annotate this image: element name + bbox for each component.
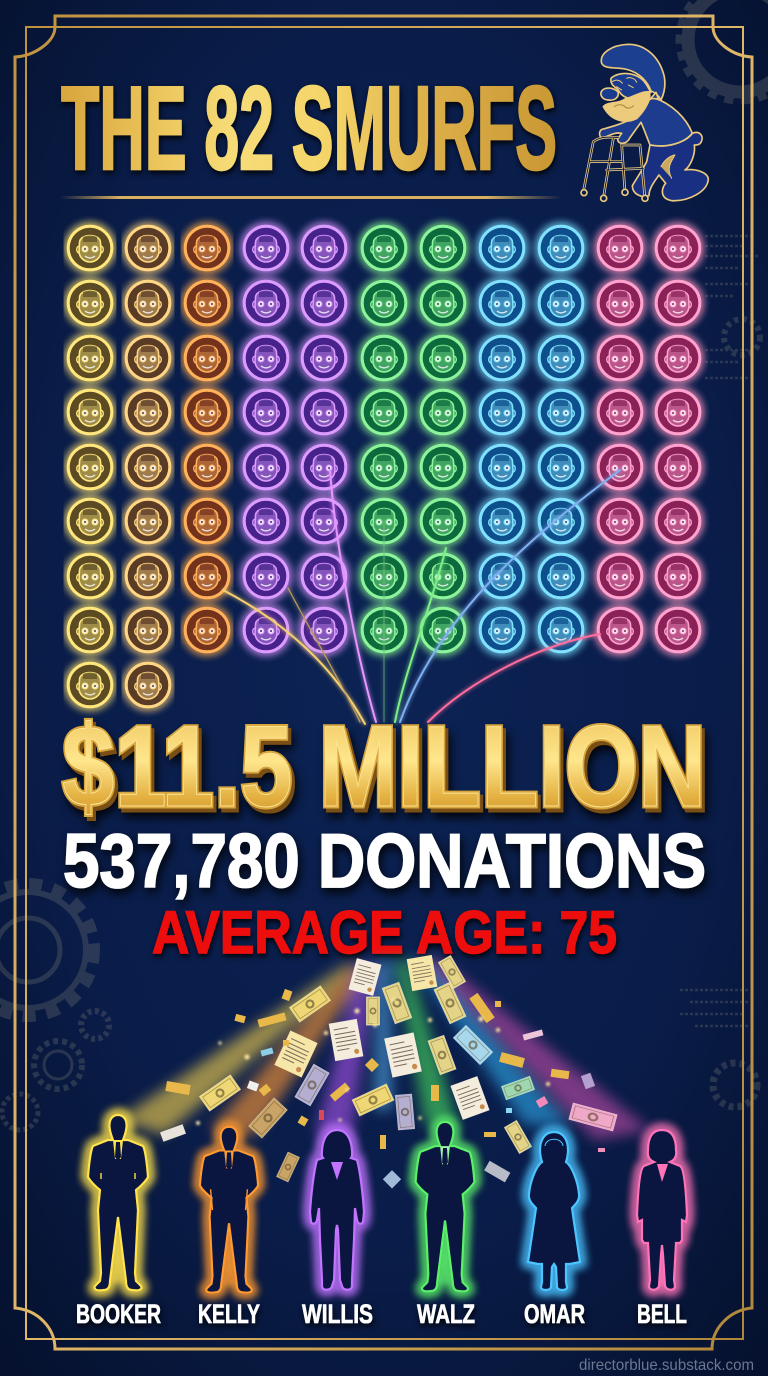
figure: Walz	[416, 1122, 474, 1291]
columns: pink	[598, 226, 700, 652]
name labels: OMAR	[524, 1299, 585, 1329]
grid of smurf face icons	[68, 226, 700, 707]
columns: blue	[480, 226, 583, 652]
figure: Booker	[88, 1115, 148, 1290]
average age: AVERAGE AGE: 75	[152, 899, 617, 966]
source credit: directorblue.substack.com	[579, 1357, 754, 1374]
flying bills and donation forms	[160, 955, 617, 1188]
figure: Omar	[528, 1132, 580, 1290]
name labels: KELLY	[198, 1299, 260, 1329]
columns: green	[362, 226, 465, 652]
name labels: BOOKER	[76, 1299, 161, 1329]
icon: old smurf with walker	[581, 44, 708, 201]
name labels: BELL	[637, 1299, 687, 1329]
column: amber	[126, 226, 170, 707]
figure: Bell	[637, 1130, 687, 1290]
name labels: WILLIS	[302, 1299, 373, 1329]
figure: Kelly	[200, 1127, 258, 1293]
column: yellow	[68, 226, 112, 707]
figure: Willis	[310, 1130, 364, 1290]
coloured streams of light	[118, 960, 650, 1140]
neon donation lines converging on the total	[223, 470, 620, 724]
column: orange	[185, 226, 229, 652]
columns: purple	[244, 226, 346, 652]
name labels: WALZ	[417, 1299, 475, 1329]
title underline	[60, 196, 562, 199]
name labels	[76, 1299, 687, 1329]
